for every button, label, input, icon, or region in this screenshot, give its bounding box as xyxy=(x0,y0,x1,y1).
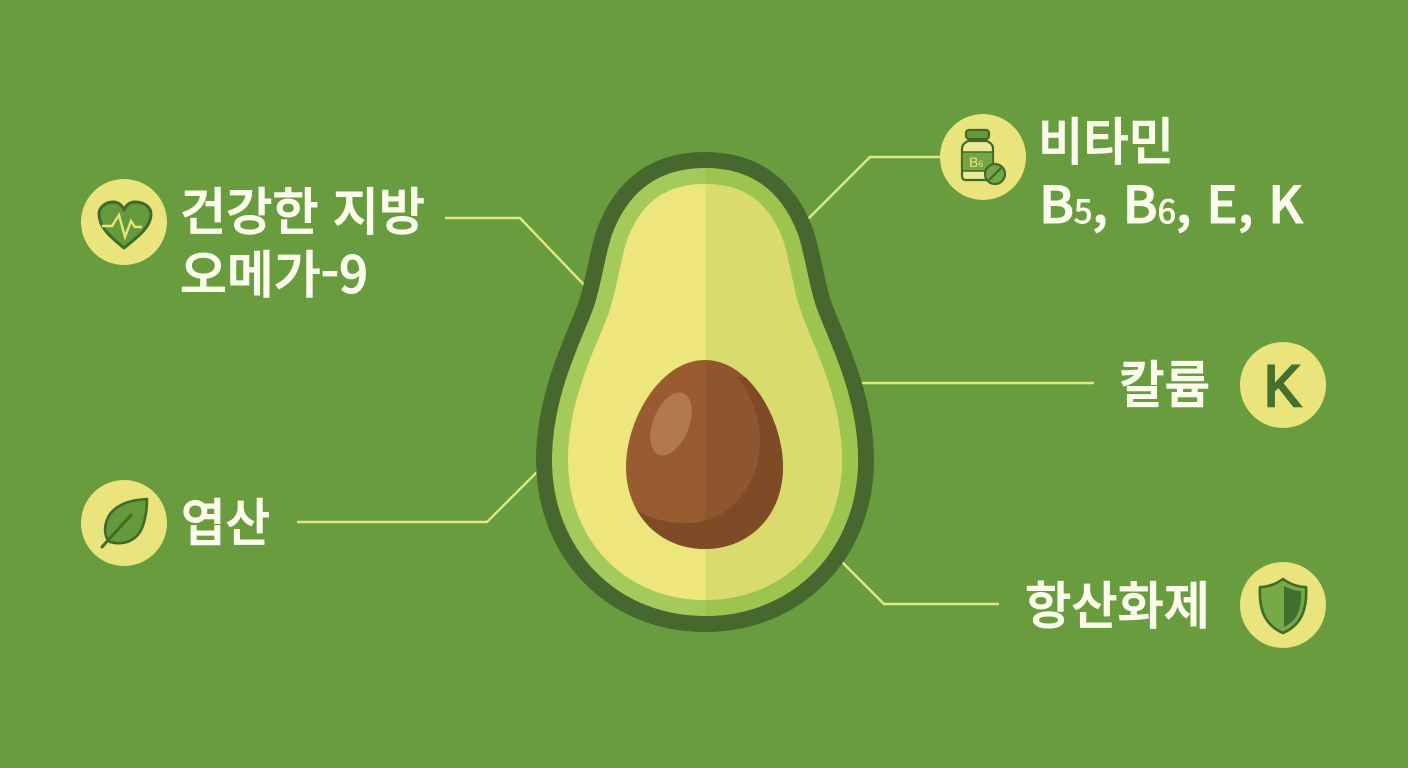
potassium icon badge: K xyxy=(1264,354,1301,419)
potassium icon badge xyxy=(1240,342,1326,428)
avocado flesh right xyxy=(705,184,842,600)
avocado rim right half xyxy=(705,168,858,616)
avocado illustration xyxy=(568,184,842,600)
potassium label: 칼륨 xyxy=(1119,344,1210,418)
connector: vitamins xyxy=(802,157,945,225)
vitamin bottle icon badge xyxy=(940,114,1026,200)
connector: antioxidants xyxy=(840,560,999,604)
heart icon badge xyxy=(81,179,167,265)
vitamin bottle icon badge: B6 xyxy=(969,154,983,170)
pit highlight xyxy=(650,392,692,456)
connector: potassium xyxy=(856,382,1094,384)
vitamins label: 비타민 xyxy=(1038,101,1174,175)
shield icon badge xyxy=(1240,562,1326,648)
healthy fat label: 건강한 지방 xyxy=(180,171,425,245)
avocado skin xyxy=(568,184,842,600)
vitamins label: B5, B6, E, K xyxy=(1039,164,1303,238)
avocado pit xyxy=(626,360,783,549)
healthy fat label: 오메가-9 xyxy=(180,234,368,308)
vitamins label xyxy=(1038,101,1303,238)
folic acid label: 엽산 xyxy=(181,482,270,556)
connector: folic acid xyxy=(297,471,538,522)
leaf icon badge xyxy=(81,480,167,566)
connector: healthy fat xyxy=(445,218,588,289)
healthy fat label xyxy=(180,171,425,308)
pit shadow xyxy=(637,377,783,549)
avocado flesh left xyxy=(568,184,842,600)
antioxidant label: 항산화제 xyxy=(1025,565,1210,639)
avocado rim xyxy=(568,184,842,600)
